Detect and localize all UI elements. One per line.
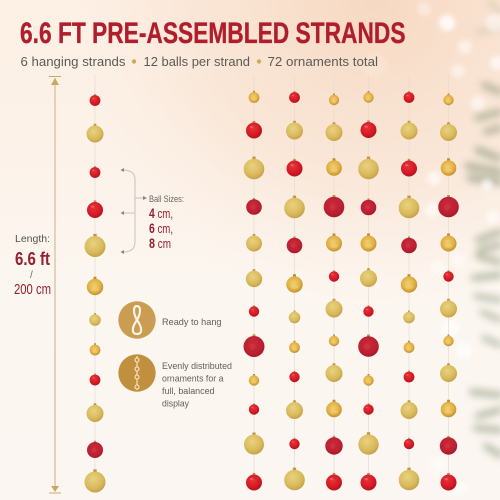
icon: ready to hang loop bbox=[118, 301, 156, 339]
text: evenly distributed: Evenly distributed bbox=[162, 361, 232, 371]
subtitle: 12 balls per strand bbox=[144, 55, 250, 69]
strand: sample sizes bbox=[84, 75, 106, 492]
text: ready to hang: Ready to hang bbox=[162, 317, 222, 327]
strand 3 bbox=[324, 75, 344, 490]
ball sizes label: Ball Sizes: bbox=[149, 194, 184, 204]
text: evenly distributed: ornaments for a bbox=[162, 374, 224, 384]
text: evenly distributed: display bbox=[162, 398, 189, 408]
strand 5 bbox=[399, 75, 419, 490]
blurred christmas tree bbox=[468, 2, 500, 455]
subtitle bbox=[20, 55, 378, 69]
strand 4 bbox=[358, 75, 379, 490]
ball sizes label: 8 cm bbox=[149, 235, 171, 251]
ball sizes label: 4 cm, bbox=[149, 205, 173, 221]
length label bbox=[14, 233, 51, 298]
length label: 6.6 ft bbox=[15, 248, 50, 269]
ball sizes label: 6 cm, bbox=[149, 220, 173, 236]
icon: evenly spaced chain bbox=[118, 354, 156, 392]
text: evenly distributed bbox=[162, 361, 232, 408]
text: evenly distributed: full, balanced bbox=[162, 386, 214, 396]
length label: / bbox=[30, 270, 33, 281]
length label: Length: bbox=[15, 233, 50, 245]
ball size bracket bbox=[120, 168, 147, 254]
length label: 200 cm bbox=[14, 281, 51, 298]
strand 1 bbox=[244, 75, 264, 490]
length arrow bbox=[49, 76, 61, 493]
strand 2 bbox=[284, 75, 305, 490]
ball sizes label bbox=[149, 194, 184, 251]
strand 6 bbox=[438, 75, 459, 490]
subtitle: 6 hanging strands bbox=[20, 55, 126, 69]
bokeh lights bbox=[363, 2, 500, 495]
subtitle: 72 ornaments total bbox=[268, 55, 378, 69]
